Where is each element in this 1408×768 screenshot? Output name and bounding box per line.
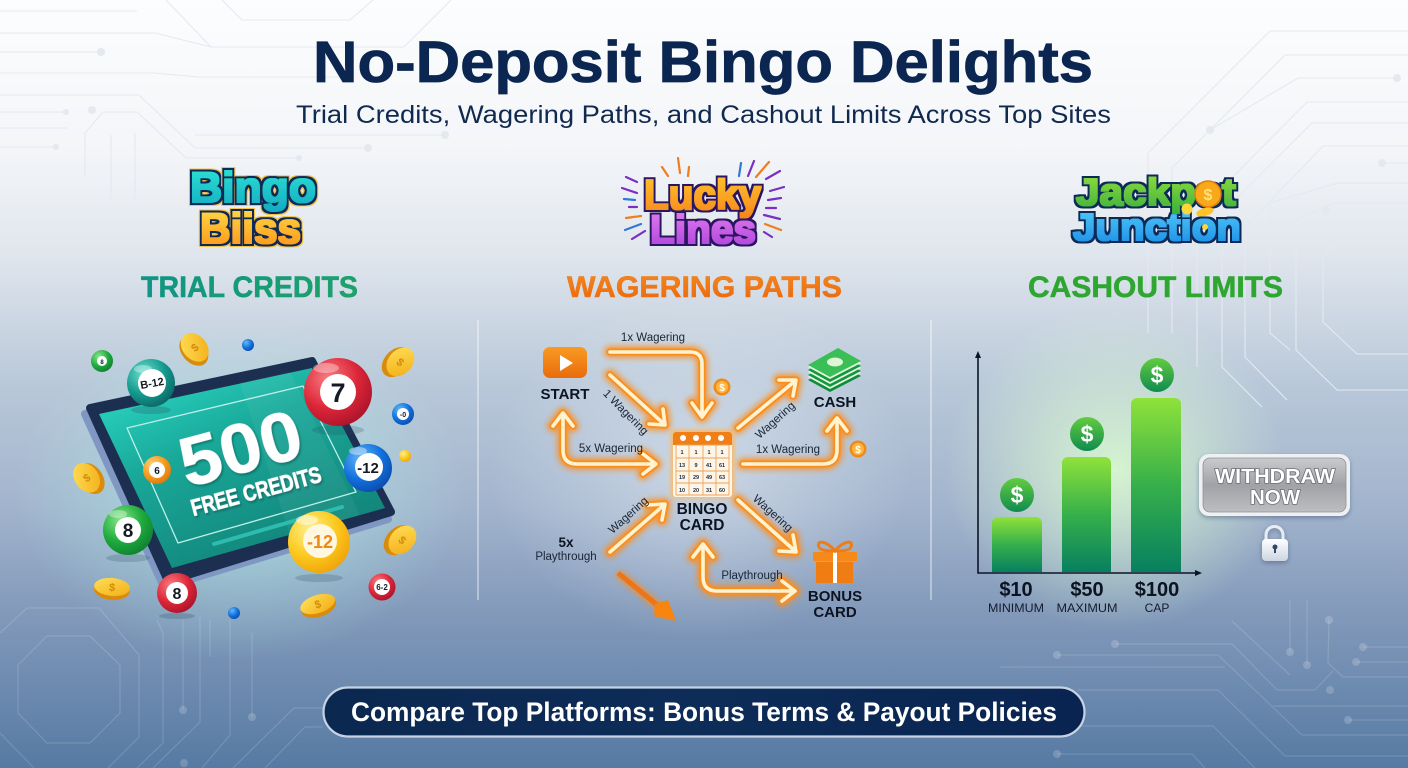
arrow labels: Wagering [754, 400, 798, 442]
bingo balls: 8 [173, 586, 182, 603]
icon: bonus gift [808, 542, 862, 621]
small coins [714, 378, 866, 458]
bar: $50 maximum [1056, 417, 1118, 615]
arrow labels: 5x Wagering [579, 443, 643, 455]
icon: bingo card [671, 430, 734, 534]
coins: $ [313, 598, 323, 612]
bar: $100 cap: $100 [1135, 579, 1179, 601]
icon: bingo card: 13 [679, 463, 685, 469]
icon: start play button: START [541, 386, 589, 403]
withdraw now button: WITHDRAW [1215, 465, 1336, 488]
bar: $100 cap: CAP [1145, 601, 1169, 615]
icon: padlock [1262, 526, 1288, 561]
arrow labels [579, 332, 820, 582]
bar: $50 maximum: MAXIMUM [1056, 601, 1118, 615]
bingo balls [91, 339, 414, 619]
bingo balls: 8 [123, 521, 133, 542]
logo: Lucky Lines: Lucky [644, 171, 762, 218]
label: 5x playthrough: 5x [558, 535, 574, 550]
chart axes [978, 355, 1198, 573]
bingo balls: -12 [307, 532, 333, 552]
bingo balls: -12 [357, 460, 379, 477]
bar: $50 maximum: $50 [1070, 579, 1104, 601]
coins: $ [395, 534, 408, 547]
subtitle: Trial Credits, Wagering Paths, and Cashout Limits Across Top Sites [296, 101, 1111, 129]
icon: bonus gift: BONUS [808, 588, 862, 605]
bar: $10 minimum: $10 [999, 579, 1033, 601]
icon: start play button [541, 347, 589, 403]
logo: Lucky Lines [622, 158, 784, 252]
arrow labels: 1x Wagering [621, 332, 685, 344]
logo: Jackpot Junction: Jackpot [1076, 172, 1236, 214]
panel: wagering paths [535, 158, 866, 621]
coins [68, 327, 422, 622]
bingo balls: 8 [100, 360, 104, 366]
icon: cash stack [808, 348, 861, 411]
coins: $ [393, 356, 406, 369]
icon: bingo card: 1 [680, 450, 684, 456]
logo: Jackpot Junction [1073, 172, 1241, 249]
heading: wagering paths: WAGERING PATHS [567, 271, 842, 304]
bingo balls: 7 [330, 378, 346, 408]
icon: bingo card: BINGO [677, 501, 727, 518]
icon: bingo card: 31 [706, 488, 712, 494]
background glow spots [15, 300, 1285, 660]
text: 500 free credits: 500 [171, 395, 311, 502]
bar: $50 maximum: $ [1081, 421, 1094, 447]
withdraw now button: NOW [1250, 486, 1301, 509]
bingo balls: -0 [400, 412, 406, 419]
logo: Bingo Bliss: Bingo [190, 164, 316, 212]
label: 5x playthrough [535, 535, 597, 563]
label: 5x playthrough: Playthrough [535, 551, 597, 563]
coins: $ [81, 472, 93, 485]
text: 500 free credits: FREE CREDITS [188, 461, 324, 521]
heading: cashout limits: CASHOUT LIMITS [1028, 271, 1283, 304]
icon: bingo card: 29 [693, 475, 699, 481]
panel: trial credits [68, 164, 422, 622]
bar: $10 minimum: MINIMUM [988, 601, 1044, 615]
icon: bingo card: 9 [694, 463, 698, 469]
bingo balls: 6 [154, 466, 160, 477]
bar chart [975, 351, 1202, 615]
small coins: $ [719, 383, 725, 394]
arrow labels: 1x Wagering [756, 444, 820, 456]
icon: bonus gift: CARD [813, 604, 857, 621]
small coins: $ [855, 445, 861, 456]
logo rays [622, 158, 784, 239]
icon: bingo card: 1 [720, 450, 724, 456]
footer banner: Compare Top Platforms: Bonus Terms & Payout Policies [351, 697, 1057, 727]
icon: bingo card: 10 [679, 488, 685, 494]
flow arrows [553, 352, 847, 621]
icon: bingo card: 61 [719, 463, 725, 469]
logo: Bingo Bliss: Biiss [200, 205, 301, 253]
icon: bingo card: 1 [707, 450, 711, 456]
logo: Jackpot Junction: $ [1204, 187, 1213, 204]
arrow labels: Wagering [607, 495, 651, 537]
withdraw now button [1199, 454, 1350, 516]
icon: bingo card: 60 [719, 488, 725, 494]
title: No-Deposit Bingo Delights [313, 30, 1093, 95]
icon: bingo card: CARD [680, 517, 724, 534]
icon: bingo card: 19 [679, 475, 685, 481]
arrow labels: Playthrough [721, 570, 783, 582]
logo: Lucky Lines: Lines [650, 208, 756, 252]
tablet [85, 361, 391, 587]
illustration: tablet with 500 free credits [68, 327, 422, 622]
arrow labels: Wagering [750, 493, 794, 535]
dividers [478, 320, 931, 600]
bar: $10 minimum [988, 478, 1044, 615]
icon: bingo card: 63 [719, 475, 725, 481]
icon: bingo card: 41 [706, 463, 712, 469]
heading: trial credits: TRIAL CREDITS [141, 271, 358, 304]
icon: bingo card: 49 [706, 475, 712, 481]
panel: cashout limits [975, 172, 1350, 615]
bar: $10 minimum: $ [1011, 482, 1024, 508]
arrow labels: 1 Wagering [600, 388, 650, 438]
icon: bingo card: 1 [694, 450, 698, 456]
icon: cash stack: CASH [814, 394, 856, 411]
logo: Jackpot Junction: Junction [1073, 207, 1241, 249]
coins: $ [108, 582, 116, 594]
bingo balls: 6-2 [376, 583, 388, 592]
footer banner [324, 688, 1084, 736]
bar: $100 cap [1131, 358, 1181, 615]
bar: $100 cap: $ [1151, 362, 1164, 388]
logo: Bingo Bliss [190, 164, 316, 253]
bingo balls: B-12 [139, 376, 165, 392]
coins: $ [189, 342, 202, 355]
icon: bingo card: 20 [693, 488, 699, 494]
